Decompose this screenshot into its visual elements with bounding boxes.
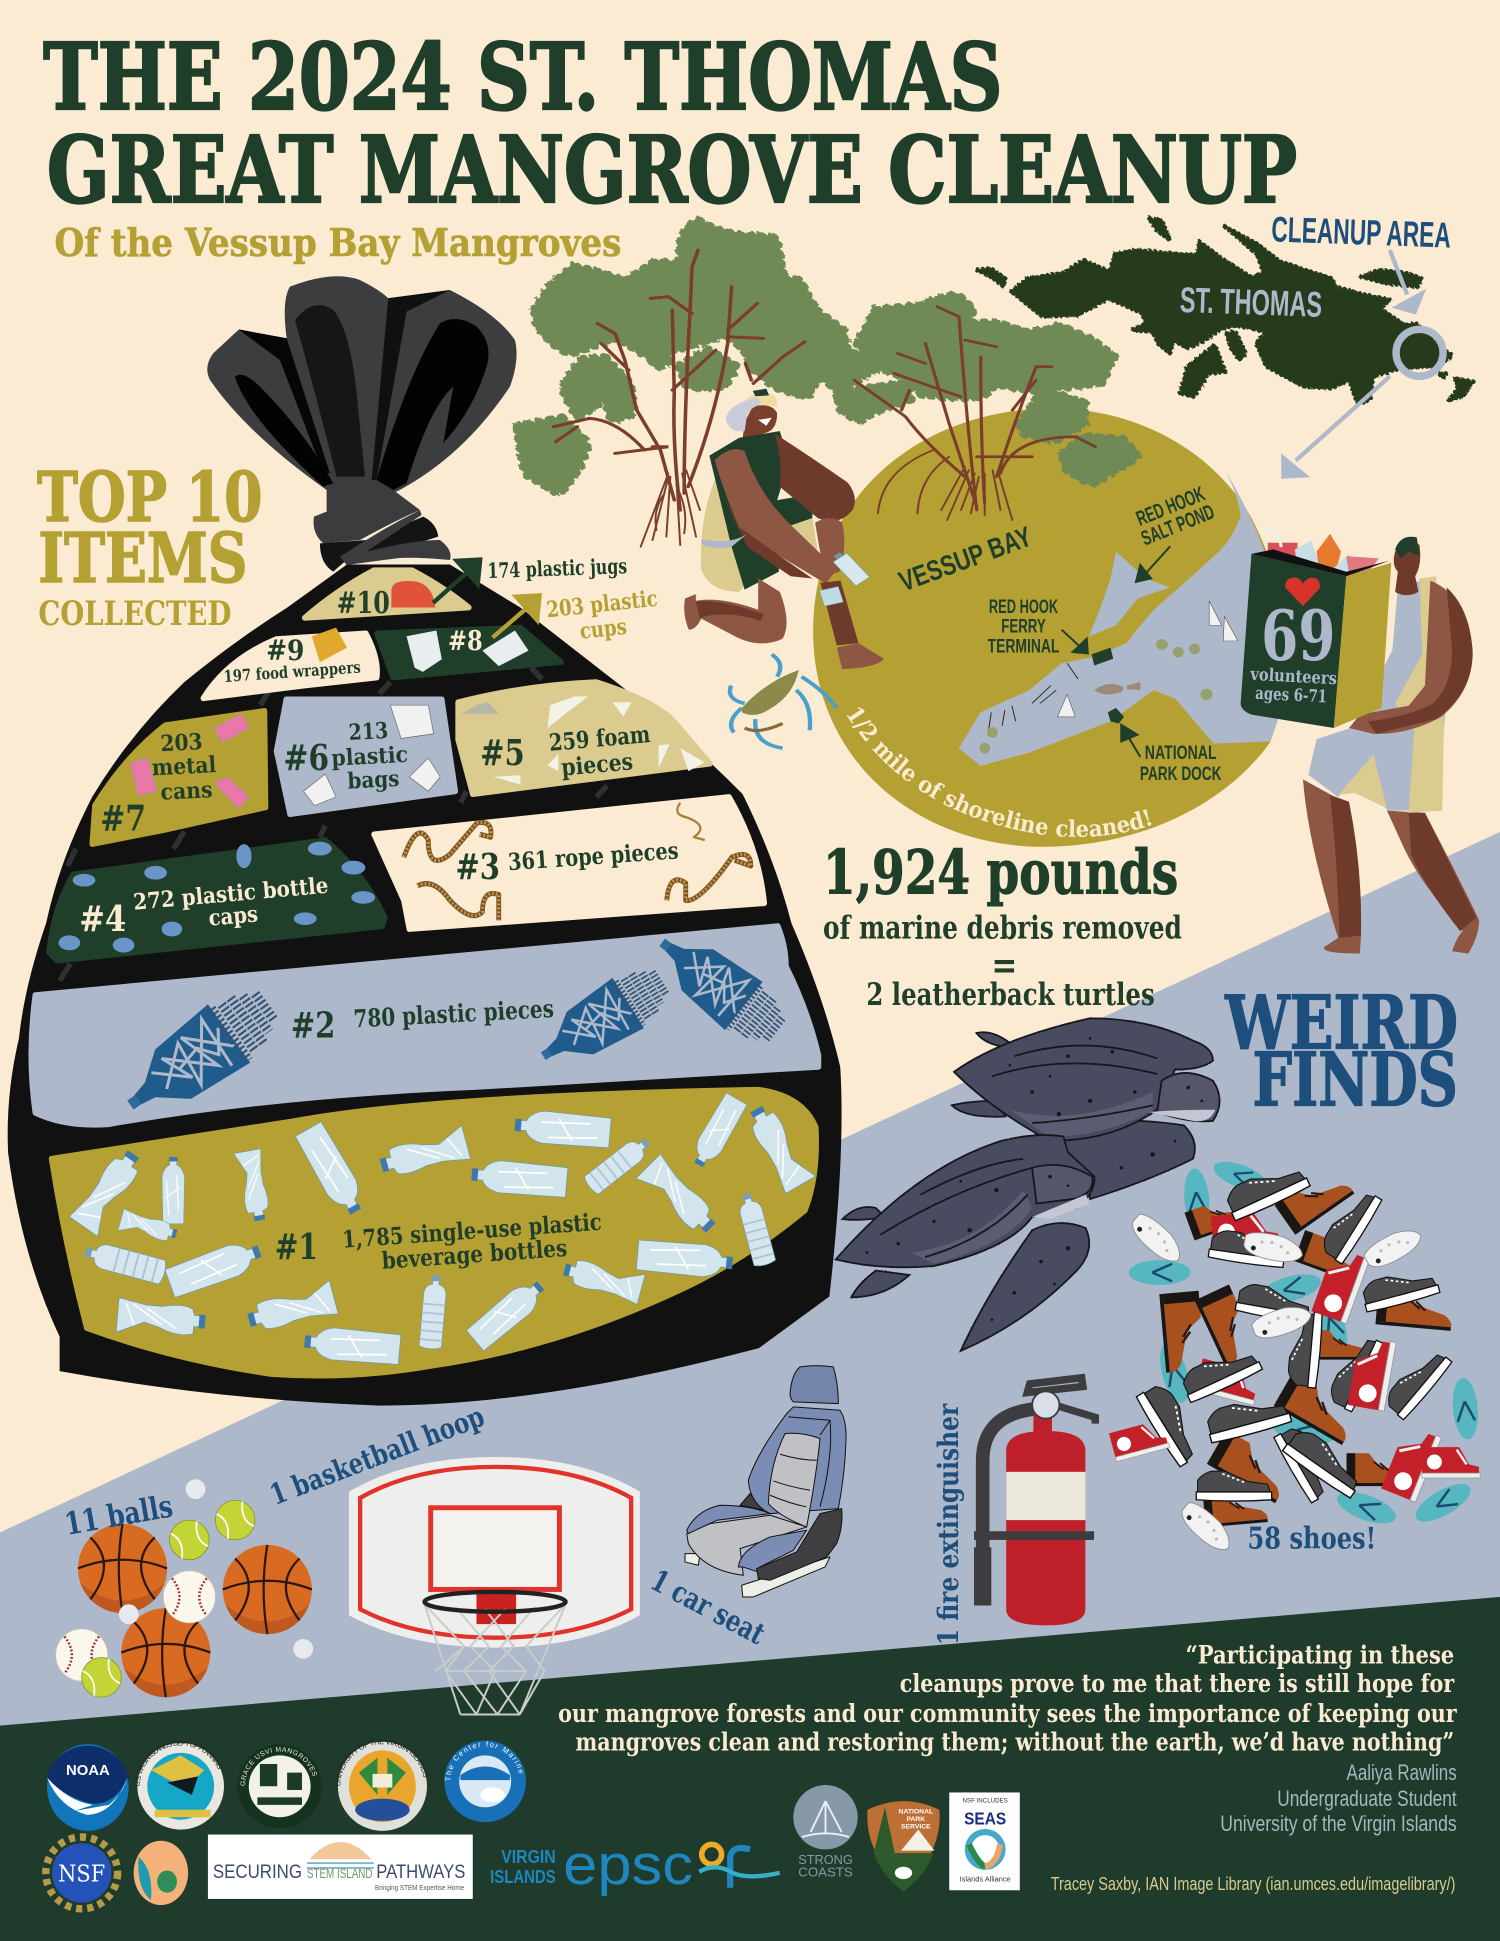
quote: “Participating in these: [1186, 1640, 1454, 1670]
item labels: bags: [347, 766, 400, 795]
bag full of trash: [1241, 527, 1391, 728]
panel 3: [374, 797, 764, 929]
label: 11 balls: 11 balls: [62, 1488, 175, 1543]
map: Vessup Bay circle: FERRY: [1001, 616, 1046, 638]
logo: National Park Service: PARK: [906, 1816, 925, 1823]
illustration: car seat: [685, 1366, 846, 1597]
item labels: cans: [160, 777, 213, 806]
illustration: kneeling volunteer: [684, 389, 884, 669]
map: Vessup Bay circle: 1/2 mile of shoreline cleaned!: [846, 707, 1152, 838]
item labels: 197 food wrappers: [223, 658, 361, 686]
label: 203 plastic cups: [545, 586, 659, 645]
bag neck and ruffled top: [207, 276, 517, 572]
shorts: [1308, 721, 1444, 811]
item labels: #7: [100, 798, 146, 840]
quote: [558, 1640, 1458, 1756]
logo: National Park Service: SERVICE: [901, 1823, 931, 1830]
panel 10: [305, 570, 469, 618]
logo: Securing STEM Island Pathways: SECURING: [213, 1862, 302, 1883]
label: St. Thomas: ST. THOMAS: [1179, 280, 1323, 325]
logo: USVI DPNR: [135, 1740, 224, 1830]
item labels: plastic: [331, 742, 409, 772]
item labels: #3: [455, 846, 500, 888]
logo: SEAS Islands Alliance: Islands Alliance: [960, 1875, 1011, 1884]
logo: Virgin Islands EPSCoR: VIRGIN: [501, 1846, 556, 1867]
map: Vessup Bay circle: VESSUP BAY: [895, 521, 1036, 598]
illustration: mangrove tree two: [838, 295, 1137, 520]
item labels: 780 plastic pieces: [353, 994, 554, 1033]
panel 2: [31, 926, 819, 1125]
panel 8: [377, 628, 561, 678]
logo: Center for Marine and Environmental Studies: [444, 1740, 526, 1822]
illustration: volunteer carrying bag: [1241, 527, 1479, 954]
legs: [1303, 779, 1361, 954]
item labels: #8: [448, 625, 483, 657]
item labels: 203: [160, 729, 203, 757]
item labels: 259 foam: [548, 720, 651, 757]
logo: Securing STEM Island Pathways: PATHWAYS: [376, 1862, 465, 1883]
logo: NSF: NSF: [58, 1860, 105, 1888]
callout: pounds of debris: 1,924 pounds: [823, 838, 1178, 909]
label: 203 plastic cups: cups: [578, 614, 628, 645]
sailboats: [1057, 601, 1238, 717]
quote: cleanups prove to me that there is still hope for: [900, 1668, 1455, 1698]
item labels: 361 rope pieces: [507, 836, 680, 876]
heading: top 10 items collected: ITEMS: [38, 519, 248, 599]
subtitle: Of the Vessup Bay Mangroves: [54, 221, 621, 266]
head: [1394, 541, 1420, 595]
logo: NOAA: NOAA: [66, 1763, 110, 1779]
illustration: volunteer carrying bag: volunteers: [1249, 665, 1338, 689]
dark green footer band: [0, 1597, 1500, 1941]
panel 4: [49, 840, 385, 961]
label: 1 fire extinguisher: 1 fire extinguisher: [931, 1403, 965, 1645]
heading: top 10 items collected: [37, 458, 262, 633]
logo: Virgin Islands EPSCoR: epsc: [563, 1833, 693, 1897]
heart: [1285, 578, 1320, 606]
diagonal blue-gray weird finds background: [0, 832, 1500, 1733]
callout: pounds of debris: [823, 838, 1182, 1013]
heading: top 10 items collected: TOP 10: [37, 458, 262, 538]
illustration: pile of 58 shoes: [1109, 1156, 1480, 1556]
callout: pounds of debris: =: [991, 943, 1017, 987]
map: St. Thomas island: [977, 218, 1473, 403]
heading: top 10 items collected: COLLECTED: [38, 594, 231, 633]
title: [43, 23, 1297, 224]
arrow: plastic jugs: [433, 560, 480, 603]
illustration: blue crab: [730, 654, 837, 748]
logo: SEAS Islands Alliance: NSF INCLUDES: [963, 1797, 1008, 1804]
illustration: volunteer carrying bag: 69: [1261, 596, 1335, 677]
item labels: 272 plastic bottle: [132, 873, 329, 916]
item labels: metal: [151, 752, 217, 781]
logo: University of the Virgin Islands: UNIVERSITY OF THE VIRGIN ISLANDS: [335, 1739, 428, 1786]
map: Vessup Bay circle: PARK DOCK: [1140, 763, 1222, 785]
item labels: #10: [337, 586, 390, 621]
logo: NSF: [46, 1837, 118, 1909]
logo: Grace USVI Mangroves: [238, 1744, 322, 1828]
logo: University of the Virgin Islands: [335, 1739, 428, 1831]
quote attribution: [1220, 1760, 1457, 1836]
label: 58 shoes: 58 shoes!: [1248, 1522, 1376, 1557]
logo: Center for Marine and Environmental Studies: The Center for Marine: [445, 1741, 522, 1781]
logo: Virgin Islands EPSCoR: ISLANDS: [490, 1866, 556, 1887]
shattered bottles: [109, 918, 792, 1134]
arrow: plastic cups: [493, 595, 540, 638]
logo: Securing STEM Island Pathways: [208, 1835, 473, 1899]
bag body: [8, 564, 842, 1406]
arrow: zoom to bay map: [1283, 376, 1390, 477]
label: 1 car seat: 1 car seat: [645, 1563, 771, 1652]
logo: turtle conservation: [134, 1841, 188, 1905]
arrow: cleanup area pointer: [1390, 250, 1422, 312]
map arrows: [1062, 546, 1170, 757]
panel 5: [458, 682, 710, 794]
logo: SEAS Islands Alliance: [949, 1792, 1020, 1890]
illustration: two leatherback turtles: [836, 1018, 1220, 1351]
callout: pounds of debris: 2 leatherback turtles: [866, 977, 1155, 1013]
map: Vessup Bay circle: NATIONAL: [1145, 742, 1217, 764]
panel 6: [276, 699, 455, 814]
arm: [1349, 581, 1473, 734]
logo: Strong Coasts: [793, 1785, 858, 1880]
label: 1 basketball hoop: 1 basketball hoop: [265, 1399, 489, 1512]
illustration: fire extinguisher: [974, 1378, 1095, 1625]
logo: Strong Coasts: COASTS: [798, 1865, 853, 1880]
logo: National Park Service: NATIONAL: [899, 1808, 933, 1815]
item labels: #9: [266, 633, 304, 667]
item labels: #5: [480, 732, 525, 774]
panel 7: [92, 711, 266, 844]
item labels: caps: [208, 901, 259, 932]
illustration: 11 balls: [56, 1479, 313, 1697]
illustration: black trash bag: [8, 276, 842, 1406]
callout: pounds of debris: of marine debris removed: [823, 908, 1182, 946]
title: GREAT MANGROVE CLEANUP: [47, 116, 1297, 224]
label: 203 plastic cups: 203 plastic: [545, 586, 659, 623]
map: Vessup Bay circle: SALT POND: [1138, 500, 1218, 551]
map: Vessup Bay circle: TERMINAL: [988, 635, 1059, 657]
water: [959, 469, 1286, 766]
logo: SEAS Islands Alliance: SEAS: [964, 1809, 1006, 1829]
map: Vessup Bay circle: RED HOOK: [989, 596, 1059, 618]
illustration: mangrove tree one: [518, 220, 878, 547]
crushed plastic bottles: [69, 1092, 816, 1366]
heading: weird finds: FINDS: [1252, 1035, 1458, 1123]
logo: Strong Coasts: STRONG: [798, 1852, 853, 1867]
map markers: [1092, 648, 1113, 666]
item labels: #4: [79, 898, 126, 940]
logo: Securing STEM Island Pathways: STEM ISLAND: [307, 1866, 373, 1881]
logo: Virgin Islands EPSCoR: [490, 1833, 780, 1897]
item labels: #1: [275, 1226, 318, 1268]
logo: National Park Service: [867, 1801, 940, 1891]
logo: NOAA: [47, 1744, 129, 1831]
torso: [1354, 576, 1447, 730]
label: 174 plastic jugs: 174 plastic jugs: [487, 553, 628, 583]
illustration: volunteer carrying bag: ages 6-71: [1255, 684, 1327, 708]
ring: cleanup area marker: [1396, 329, 1443, 376]
item labels: 213: [348, 718, 389, 746]
map: Vessup Bay circle: [813, 410, 1278, 847]
heading: weird finds: WEIRD: [1224, 978, 1458, 1066]
fish: [1094, 682, 1140, 695]
panel 9: [203, 633, 377, 698]
item labels: pieces: [560, 747, 634, 782]
panel 1: [51, 1090, 816, 1376]
item labels: [79, 586, 680, 1275]
item labels: #6: [283, 737, 329, 779]
logo: USVI DPNR: U.S. VIRGIN ISLANDS DEPT OF PLANNING: [135, 1740, 222, 1786]
illustration: basketball hoop: [349, 1457, 640, 1714]
title: THE 2024 ST. THOMAS: [43, 23, 1002, 131]
item labels: #2: [291, 1004, 335, 1046]
map: Vessup Bay circle: RED HOOK: [1133, 483, 1208, 531]
heading: weird finds: [1224, 978, 1458, 1123]
quote attribution: Aaliya Rawlins: [1347, 1760, 1457, 1785]
logo: Securing STEM Island Pathways: Bringing STEM Expertise Home: [375, 1883, 464, 1892]
item labels: 1,785 single-use plastic: [341, 1208, 603, 1254]
item labels: beverage bottles: [381, 1234, 568, 1275]
logo: Grace USVI Mangroves: GRACE USVI MANGROVES: [240, 1746, 317, 1786]
